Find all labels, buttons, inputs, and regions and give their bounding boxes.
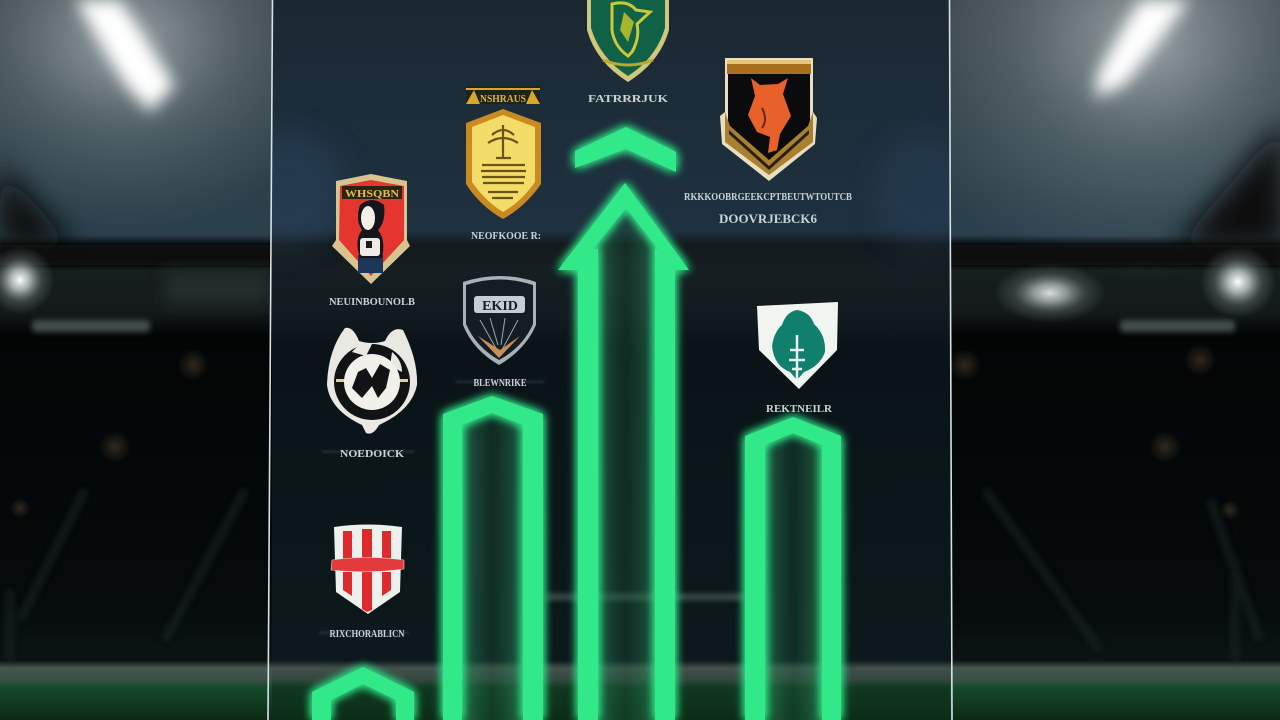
label: black crest, two lines: DOOVRJEBCK6 [719, 211, 817, 226]
arrow: right bar [745, 417, 841, 720]
arrow: chevron above central arrow [575, 127, 676, 172]
arrow: second bar [443, 396, 543, 720]
label: green crest: FATRRRJUK [588, 93, 669, 105]
crest: black and orange shield [720, 58, 817, 181]
crest: red and black shield [332, 174, 410, 284]
label: white badge: NOEDOICK [340, 449, 404, 460]
arrow: tall central arrow [558, 183, 689, 720]
label: black crest, two lines: RKKKOOBRGEEKCPTBEUTWTOUTCB [684, 191, 853, 203]
crest: red and black shield: WHSQBN [345, 188, 399, 200]
gold banner above shield: NSHRAUS [480, 93, 526, 105]
label: red crest: NEUINBOUNOLB [329, 296, 416, 308]
crest: green round shield [587, 0, 669, 82]
arrow: small left bar [312, 667, 414, 720]
label: teal crest: REKTNEILR [766, 404, 833, 415]
label: white badge [322, 449, 414, 460]
crest: white and black round badge [327, 328, 417, 434]
label: striped crest: RIXCHORABLICN [330, 628, 405, 640]
central glass panel [225, 0, 975, 720]
crest: teal and white shield [757, 302, 838, 389]
label: gold crest: NEOFKOOE R: [471, 230, 541, 242]
crest: gold shield [466, 86, 541, 219]
label: black crest, two lines [684, 191, 853, 226]
crest: dark silver shield [463, 276, 536, 365]
label: silver crest: BLEWNRIKE [474, 378, 527, 389]
crest: red and white striped shield [331, 524, 404, 614]
crest: dark silver shield: EKID [482, 299, 518, 314]
